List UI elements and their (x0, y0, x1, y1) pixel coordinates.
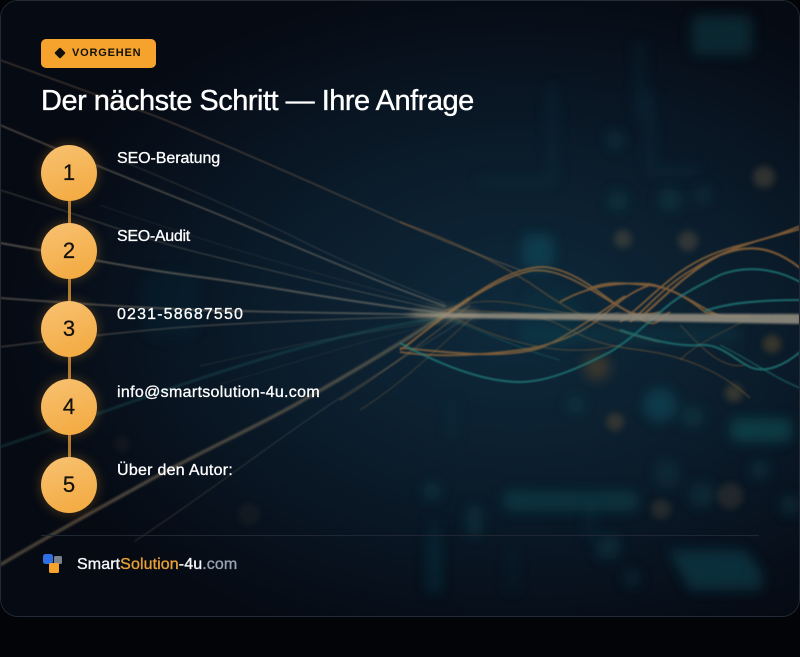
warm bokeh (114, 166, 781, 525)
teal bokeh (140, 15, 800, 595)
badge: Vorgehen (41, 39, 156, 68)
step 1 number: 1 (63, 160, 75, 185)
teal waves (400, 269, 800, 388)
heading: Der nächste Schritt — Ihre Anfrage (41, 85, 474, 117)
step 2 number (41, 223, 97, 279)
step 2 number: 2 (63, 238, 75, 263)
step 3 number (41, 301, 97, 357)
step 1 text: SEO-Beratung (117, 150, 220, 167)
thick tan stream (0, 298, 470, 565)
step 5 number (41, 457, 97, 513)
step 3 text: 0231-58687550 (117, 306, 244, 323)
step 5 number: 5 (63, 472, 75, 497)
bright core beam (400, 313, 800, 324)
step 4 number: 4 (63, 394, 75, 419)
step 3 number: 3 (63, 316, 75, 341)
step 2 text: SEO-Audit (117, 228, 190, 245)
faint circuit traces (434, 40, 700, 590)
brand name: SmartSolution-4u.com (77, 556, 237, 573)
icon: logo squares (43, 554, 62, 573)
badge: Vorgehen: VORGEHEN (72, 47, 141, 59)
step 4 text: info@smartsolution-4u.com (117, 384, 320, 401)
orange waves (400, 222, 800, 398)
fan of light lines from the left (0, 60, 520, 541)
teal line left (0, 318, 440, 447)
step 1 number (41, 145, 97, 201)
step connector lines (68, 200, 71, 458)
step 5 text: Über den Autor: (117, 462, 233, 479)
step 4 number (41, 379, 97, 435)
